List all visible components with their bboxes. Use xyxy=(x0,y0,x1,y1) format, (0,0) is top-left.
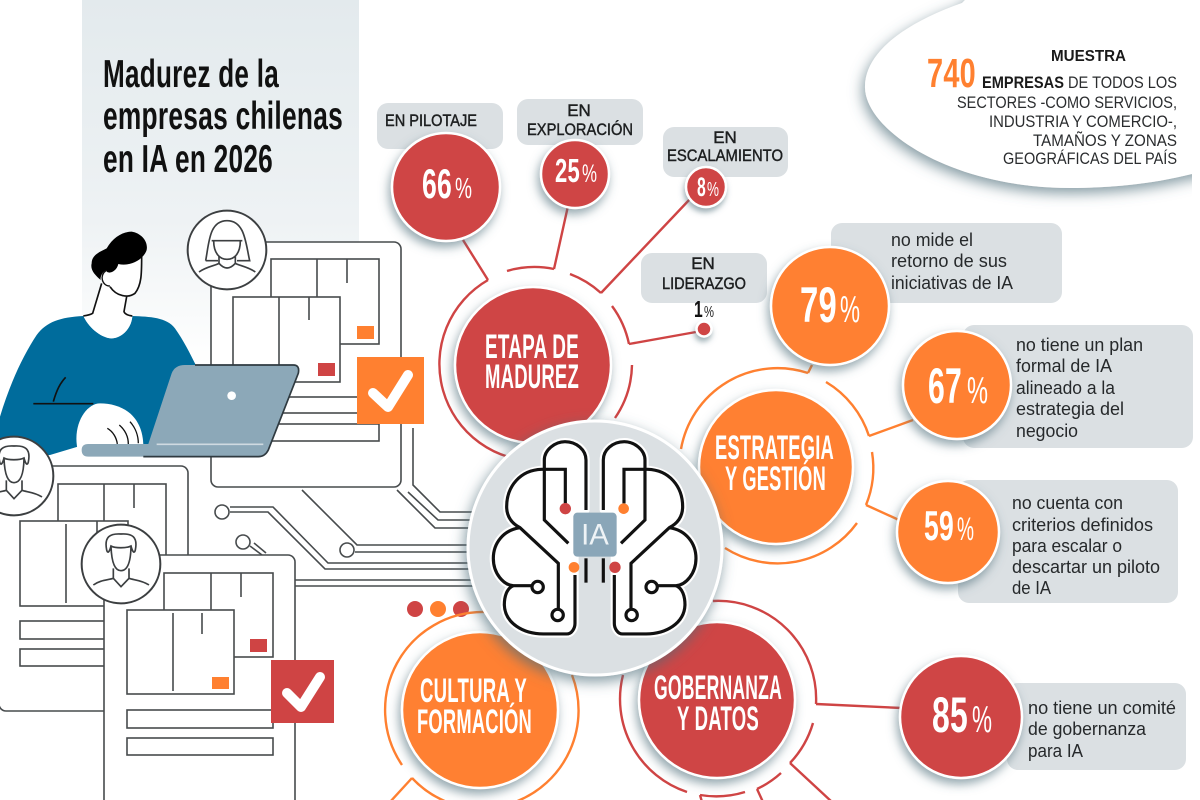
label: en escalamiento xyxy=(663,127,788,177)
sample text: 740 xyxy=(927,50,976,96)
circle: 25%: 25 xyxy=(555,152,580,189)
main circle: gobernanza y datos: GOBERNANZA xyxy=(654,669,782,707)
icon: red check box xyxy=(271,660,334,723)
arcs and connectors xyxy=(620,601,902,800)
arcs and connectors xyxy=(681,365,913,563)
callout: 79% xyxy=(771,223,1062,365)
brain right traces xyxy=(603,442,696,634)
circle: 8%: % xyxy=(707,179,719,201)
main circle: gobernanza y datos xyxy=(639,622,795,778)
panel: cultura y formación xyxy=(385,612,579,800)
central hub xyxy=(468,421,722,675)
label: en exploración: EN xyxy=(567,101,591,120)
circle: 25%: % xyxy=(582,160,597,188)
callout: 59% xyxy=(897,480,1178,603)
callout: 79%: % xyxy=(840,289,860,331)
hair xyxy=(91,232,147,280)
icon: circuit brain with IA chip: IA xyxy=(581,519,609,552)
callout: 67%: no tiene un plan xyxy=(1016,335,1143,355)
circle: 8%: 8 xyxy=(697,172,706,202)
label: en pilotaje: EN PILOTAJE xyxy=(385,111,477,130)
callout: 67%: formal de IA xyxy=(1016,356,1112,376)
callout: 59%: criterios definidos xyxy=(1012,515,1153,535)
main circle: estrategia y gestión: Y GESTIÓN xyxy=(725,460,826,498)
callout: 85%: % xyxy=(972,699,992,741)
callout: 85%: para IA xyxy=(1028,741,1083,761)
label: en liderazgo xyxy=(641,253,767,303)
panel: estrategia y gestión xyxy=(681,223,1193,603)
value: 1%: % xyxy=(704,304,714,321)
callout: 67%: 67 xyxy=(928,358,962,414)
arm lines xyxy=(33,377,93,404)
brain right silhouette xyxy=(603,442,696,634)
label: en liderazgo: LIDERAZGO xyxy=(662,274,746,293)
icon: man avatar left xyxy=(0,437,53,515)
title: empresas chilenas xyxy=(103,95,343,138)
value: 1%: 1 xyxy=(694,296,703,322)
arcs and connectors xyxy=(385,612,579,800)
callout: 67%: estrategia del xyxy=(1016,399,1124,419)
label: en exploración xyxy=(517,99,643,145)
panel: sample note xyxy=(865,0,1200,220)
chip xyxy=(573,513,617,557)
main circle: cultura y formación: CULTURA Y xyxy=(420,672,527,710)
brain left traces xyxy=(493,442,586,634)
icon: circuit brain with IA chip xyxy=(493,442,696,634)
callout: 85%: 85 xyxy=(932,687,968,743)
label: en escalamiento: EN xyxy=(713,128,737,147)
sample text: EMPRESAS DE TODOS LOS xyxy=(982,73,1177,92)
label: en escalamiento: ESCALAMIENTO xyxy=(667,146,783,165)
circle: 8% xyxy=(686,167,726,207)
title xyxy=(103,53,343,181)
main circle: cultura y formación: FORMACIÓN xyxy=(417,703,532,741)
laptop xyxy=(82,365,299,457)
callout: 59%: % xyxy=(957,511,974,547)
decorative dots xyxy=(407,601,469,617)
main circle: etapa de madurez xyxy=(455,287,611,443)
arcs and connectors xyxy=(439,199,696,461)
callout: 59%: no cuenta con xyxy=(1012,493,1123,513)
callout: 59%: para escalar o xyxy=(1012,536,1122,556)
callout: 59%: 59 xyxy=(924,502,954,549)
hand xyxy=(76,403,143,448)
circle: 66%: 66 xyxy=(422,160,452,207)
label: en exploración: EXPLORACIÓN xyxy=(527,120,633,139)
document 1 with orange check xyxy=(211,242,424,487)
brain left silhouette xyxy=(493,442,586,634)
title background panel xyxy=(82,0,359,365)
panel: gobernanza y datos xyxy=(620,601,1186,800)
sample text: INDUSTRIA Y COMERCIO-, xyxy=(989,112,1177,131)
document 2 xyxy=(0,466,188,711)
callout: 85%: de gobernanza xyxy=(1028,719,1147,739)
title: en IA en 2026 xyxy=(103,138,273,181)
value: 1% xyxy=(694,296,714,336)
main circle: gobernanza y datos: Y DATOS xyxy=(677,700,759,738)
callout: 67%: % xyxy=(967,370,988,412)
sample text: TAMAÑOS Y ZONAS xyxy=(1033,131,1177,150)
circle: 25% xyxy=(541,140,609,208)
neck and face xyxy=(83,253,142,338)
callout: 79%: 79 xyxy=(800,277,837,333)
circle: 66%: % xyxy=(455,173,472,205)
callout: 79%: iniciativas de IA xyxy=(891,273,1013,293)
icon: woman avatar xyxy=(188,211,266,289)
person at laptop xyxy=(0,232,197,458)
label: en liderazgo: EN xyxy=(691,254,715,273)
document 3 with red check xyxy=(104,555,334,800)
main circle: etapa de madurez: ETAPA DE xyxy=(485,328,579,366)
main circle: estrategia y gestión: ESTRATEGIA xyxy=(715,429,834,467)
callout: 79%: no mide el xyxy=(891,230,973,250)
sweater xyxy=(0,316,197,458)
icon: man avatar center xyxy=(82,525,160,603)
callout: 79%: retorno de sus xyxy=(891,251,1007,271)
label: en pilotaje xyxy=(377,103,503,149)
circle: 66% xyxy=(392,133,500,241)
main circle: cultura y formación xyxy=(402,632,558,788)
panel: etapa de madurez xyxy=(377,99,788,461)
icon: orange check box xyxy=(357,357,424,424)
callout: 67% xyxy=(903,325,1193,448)
callout: 59%: de IA xyxy=(1012,578,1051,598)
callout: 67%: negocio xyxy=(1016,421,1078,441)
title: Madurez de la xyxy=(103,53,279,96)
circuit lines xyxy=(215,428,480,586)
sample text: MUESTRA xyxy=(1051,48,1126,65)
callout: 85% xyxy=(900,656,1186,778)
callout: 59%: descartar un piloto xyxy=(1012,557,1160,577)
callout: 85%: no tiene un comité xyxy=(1028,698,1176,718)
main circle: estrategia y gestión xyxy=(699,390,853,544)
sample text xyxy=(927,48,1177,168)
main circle: etapa de madurez: MADUREZ xyxy=(485,358,579,396)
callout: 67%: alineado a la xyxy=(1016,378,1116,398)
